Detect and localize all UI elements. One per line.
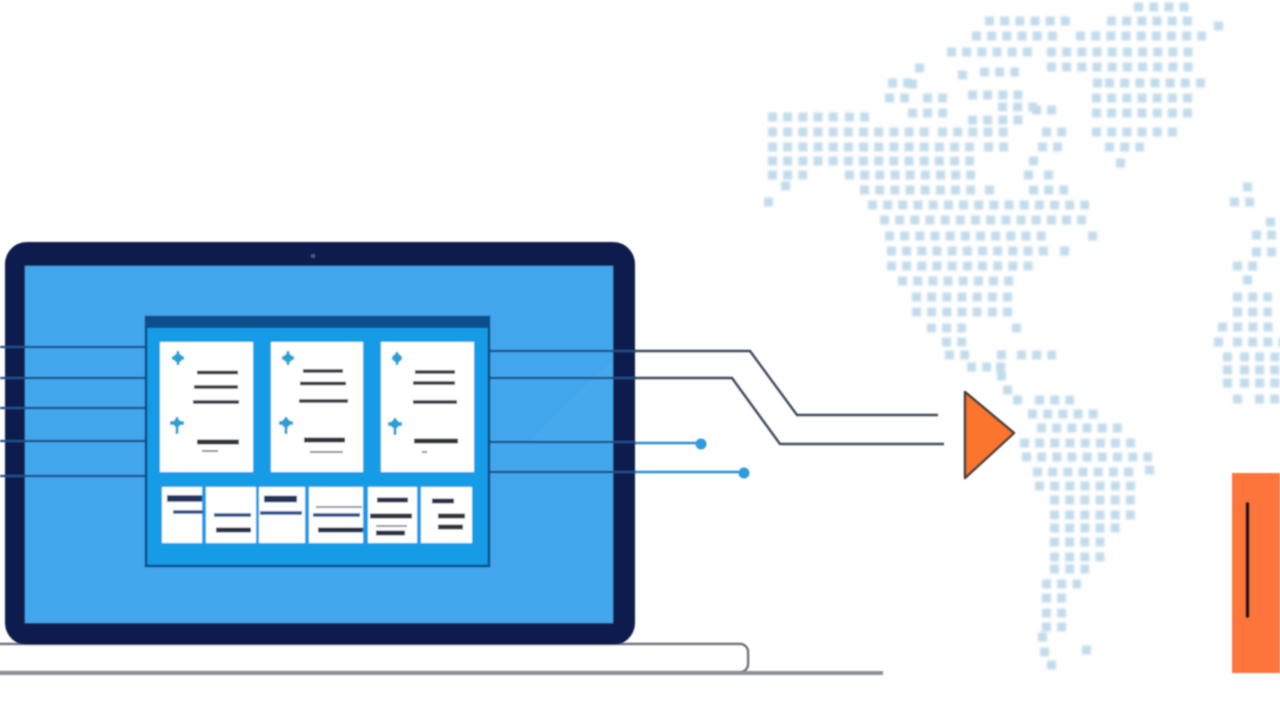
laptop body <box>5 242 635 645</box>
laptop screen <box>25 266 613 623</box>
card icons <box>170 351 402 435</box>
orange triangle marker <box>965 392 1014 478</box>
webcam <box>311 254 315 258</box>
panel bar <box>1246 502 1250 618</box>
orange panel <box>1232 473 1280 673</box>
laptop <box>0 242 883 675</box>
laptop base <box>0 644 883 675</box>
screen highlight <box>530 360 613 445</box>
dashboard window <box>146 316 489 566</box>
lower cards <box>162 487 472 543</box>
upper cards <box>160 342 474 472</box>
connector lines right of laptop <box>634 351 944 478</box>
connector end dots <box>696 438 750 478</box>
card text lines <box>193 371 458 452</box>
lines on screen <box>0 347 634 476</box>
lower card lines <box>167 498 465 533</box>
world map dots <box>764 7 1280 665</box>
